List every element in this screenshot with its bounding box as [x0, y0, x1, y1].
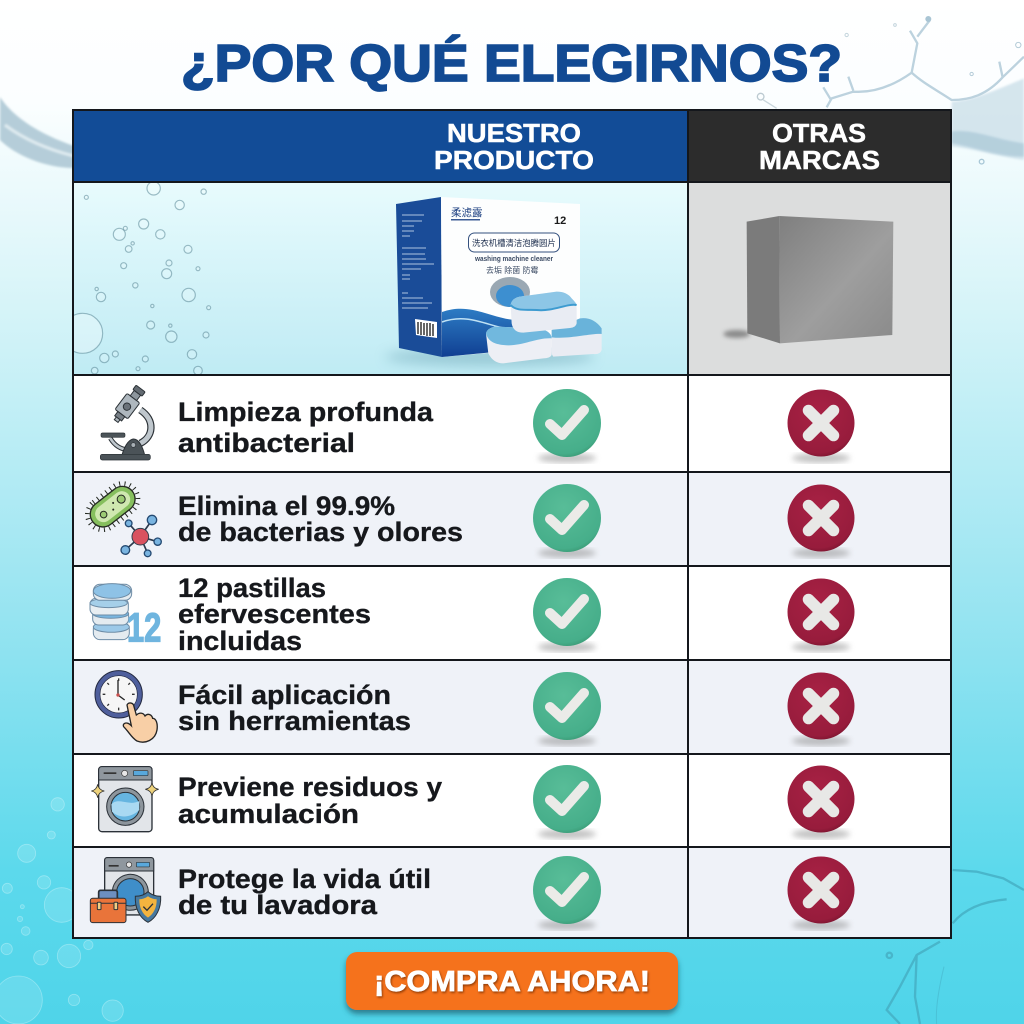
panel: product image cell: [63, 182, 688, 375]
text: 12 pastillas efervescentes incluidas: incluidas: [178, 626, 302, 656]
icon: stacked tablets with 12: [90, 584, 161, 651]
barcode: [415, 319, 437, 338]
tablets: [486, 292, 602, 363]
header: otras marcas: [688, 110, 951, 182]
icon: washer, toolbox and shield: [90, 858, 161, 923]
row 6: protege la vida util: [72, 847, 951, 938]
icon: green check: [533, 389, 601, 463]
number 12: 12: [127, 605, 161, 651]
box subtitle: washing machine cleaner: [474, 256, 553, 263]
box label: 洗衣机槽清洁泡腾圆片: [472, 238, 556, 248]
text: protege la vida util de tu lavadora: de tu lavadora: [178, 890, 378, 920]
row 1: limpieza profunda: [72, 375, 951, 472]
bubbles in product cell: [63, 182, 211, 375]
text: protege la vida util de tu lavadora: Protege la vida útil: [178, 864, 431, 894]
text: facil aplicacion sin herramientas: [178, 680, 411, 736]
generic grey box: [723, 216, 893, 343]
icon: red cross: [788, 390, 854, 463]
icon: green check: [533, 856, 601, 930]
row 2: elimina bacterias: [72, 472, 951, 566]
product box: [385, 197, 602, 366]
box logo: 柔滤露: [451, 206, 483, 219]
button: compra ahora: [346, 952, 678, 1010]
title: ¿POR QUÉ ELEGIRNOS?: [181, 35, 842, 93]
text: elimina el 99.9%: [178, 491, 463, 547]
row 4: facil aplicacion: [72, 660, 951, 754]
splash: top right water: [757, 16, 1024, 164]
text: previene residuos y acumulacion: Previene residuos y: [178, 772, 442, 802]
text: previene residuos y acumulacion: [178, 772, 442, 829]
icon: clock and hand: [95, 671, 157, 742]
header: otras marcas: MARCAS: [759, 145, 880, 175]
icon: green check: [533, 765, 601, 839]
icon: red cross: [788, 578, 854, 652]
bubbles: bottom left: [0, 798, 123, 1024]
text: previene residuos y acumulacion: acumulación: [178, 799, 359, 829]
text: facil aplicacion sin herramientas: Fácil aplicación: [178, 680, 391, 710]
icon: red cross: [788, 484, 854, 558]
comparison table: [63, 110, 951, 938]
splash: bottom right water: [887, 870, 1024, 1024]
header: nuestro producto: NUESTRO: [447, 118, 581, 148]
header: otras marcas: OTRAS: [772, 118, 866, 148]
text: 12 pastillas efervescentes incluidas: [178, 573, 371, 656]
icon: red cross: [788, 766, 854, 839]
button: compra ahora: ¡COMPRA AHORA!: [374, 966, 650, 998]
icon: red cross: [788, 856, 854, 930]
icon: microscope: [100, 384, 151, 460]
header: nuestro producto: [72, 110, 688, 182]
box label: [468, 233, 560, 252]
header: nuestro producto: PRODUCTO: [434, 145, 594, 175]
text: elimina el 99.9%: de bacterias y olores: [178, 517, 463, 547]
icon: green check: [533, 672, 601, 746]
icon: red cross: [788, 672, 854, 746]
text: protege la vida util de tu lavadora: [178, 864, 431, 920]
box claims: 去垢 除菌 防霉: [486, 265, 538, 275]
text: limpieza profunda antibacterial: [178, 397, 434, 458]
splash: top left water: [0, 97, 74, 168]
icon: washing machine: [91, 767, 159, 832]
text: limpieza profunda antibacterial: antibacterial: [178, 428, 355, 458]
icon: green check: [533, 484, 601, 558]
box side text lines: [402, 215, 434, 308]
icon: bacteria and molecule: [81, 477, 161, 557]
text: limpieza profunda antibacterial: Limpieza profunda: [178, 397, 434, 427]
text: elimina el 99.9%: Elimina el 99.9%: [178, 491, 395, 521]
text: 12 pastillas efervescentes incluidas: 12 pastillas: [178, 573, 326, 603]
row 5: previene residuos: [72, 754, 951, 847]
text: facil aplicacion sin herramientas: sin herramientas: [178, 706, 411, 736]
row 3: 12 pastillas: [72, 566, 951, 660]
box count: 12: [554, 215, 566, 227]
panel: other brand image cell: [688, 182, 951, 375]
text: 12 pastillas efervescentes incluidas: efervescentes: [178, 599, 371, 629]
icon: green check: [533, 578, 601, 652]
